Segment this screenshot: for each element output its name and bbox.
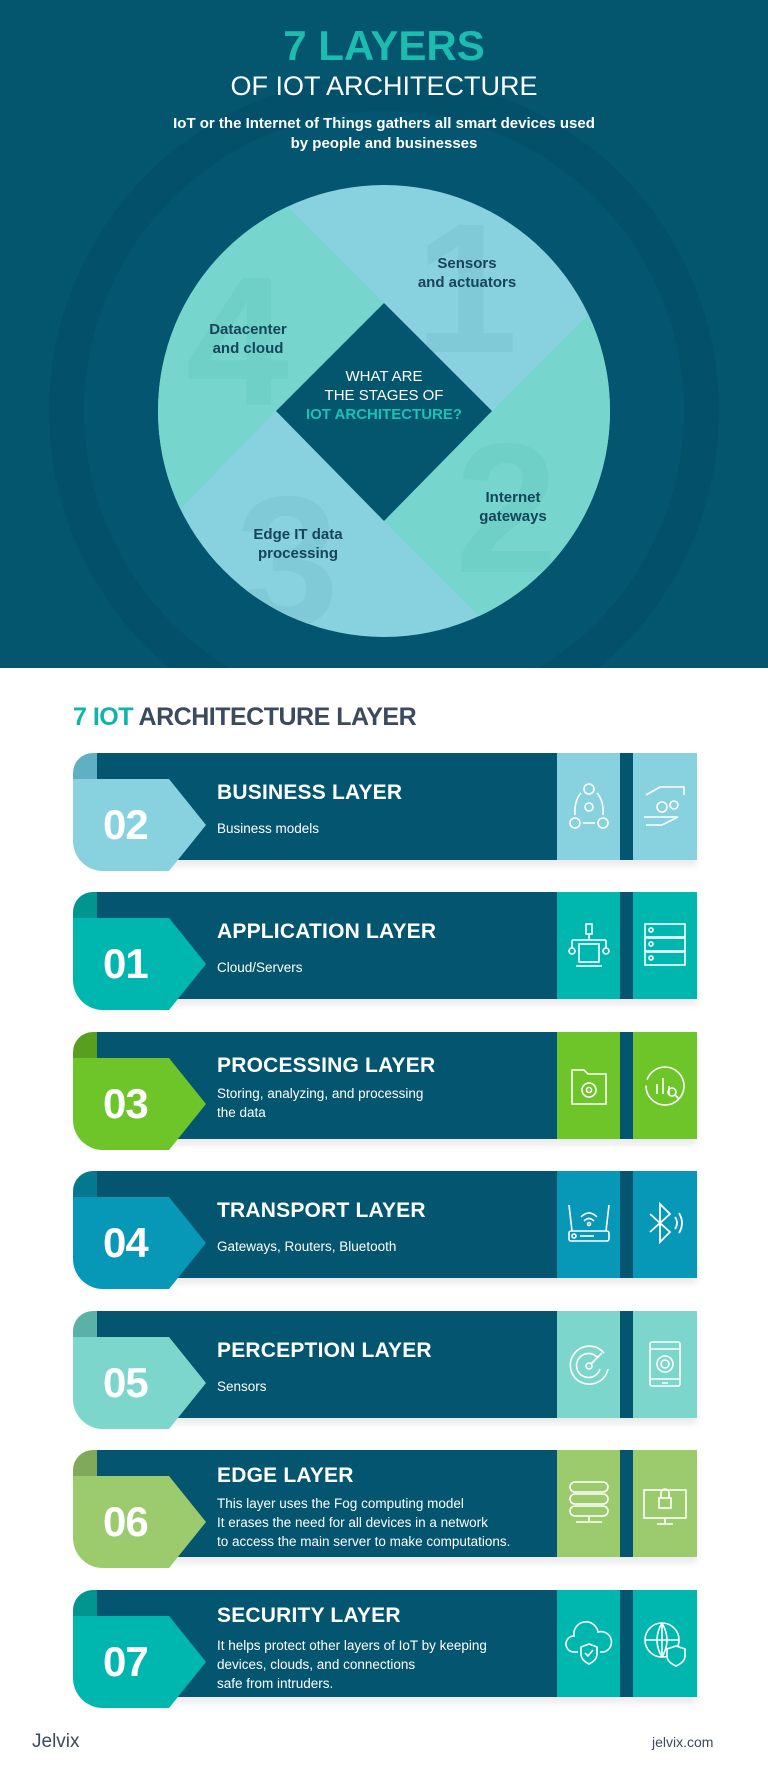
icon: monitor lock: [643, 1488, 687, 1525]
label: edge: processing: [258, 545, 338, 562]
icon: analytics: [645, 1066, 685, 1106]
subtitle: by people and businesses: [291, 135, 477, 152]
label: datacenter: [209, 321, 287, 357]
row: edge layer: [73, 1450, 698, 1568]
row: security layer: [73, 1590, 698, 1708]
row: perception layer: 05: [103, 1359, 148, 1406]
pinwheel circle diagram: 2: [455, 406, 558, 612]
label: sensors: and actuators: [418, 274, 516, 291]
icon: network node: [568, 923, 610, 967]
row: edge layer: 06: [103, 1498, 148, 1545]
center question: WHAT ARE: [346, 368, 422, 385]
title: 7 LAYERS: [283, 22, 485, 69]
row: edge layer: to access the main server to make computations.: [217, 1534, 510, 1549]
icon: folder gear: [571, 1069, 607, 1105]
row: perception layer: [73, 1311, 698, 1429]
row: business layer: BUSINESS LAYER: [217, 781, 402, 804]
title: OF IOT ARCHITECTURE: [230, 71, 538, 101]
icon: bluetooth: [650, 1202, 683, 1244]
label: gateways: gateways: [479, 508, 547, 525]
row: security layer: safe from intruders.: [217, 1676, 333, 1691]
subtitle: [173, 115, 595, 152]
row: processing layer: 03: [103, 1080, 148, 1127]
icon: servers: [644, 923, 686, 966]
icon: radar: [570, 1345, 609, 1385]
icon: phone fingerprint: [649, 1341, 681, 1387]
section heading: 7 IOT ARCHITECTURE LAYER: [73, 703, 416, 731]
row: security layer: devices, clouds, and connections: [217, 1657, 415, 1672]
label: edge: Edge IT data: [253, 526, 343, 543]
row: business layer: 02: [103, 801, 148, 848]
icon: cloud shield: [565, 1621, 612, 1665]
row: perception layer: PERCEPTION LAYER: [217, 1339, 432, 1362]
row: edge layer: This layer uses the Fog computing model: [217, 1496, 464, 1511]
label: datacenter: and cloud: [213, 340, 283, 357]
row: transport layer: [73, 1171, 698, 1289]
icon: hands gears: [644, 786, 685, 826]
top panel background: [0, 0, 768, 668]
row: transport layer: 04: [103, 1219, 148, 1266]
pinwheel circle diagram: 1: [415, 186, 518, 392]
row: application layer: 01: [103, 940, 148, 987]
subtitle: IoT or the Internet of Things gathers all smart devices used: [173, 115, 595, 132]
row: application layer: [73, 892, 698, 1010]
icon: router: [568, 1204, 610, 1242]
footer logo: Jelvix: [32, 1731, 80, 1752]
row: application layer: APPLICATION LAYER: [217, 920, 436, 943]
row: security layer: 07: [103, 1638, 148, 1685]
label: sensors: [418, 255, 516, 291]
center question: THE STAGES OF: [325, 387, 443, 404]
row: application layer: Cloud/Servers: [217, 960, 303, 975]
label: edge: [253, 526, 343, 562]
row: security layer: It helps protect other layers of IoT by keeping: [217, 1638, 487, 1653]
pinwheel circle diagram: [158, 185, 610, 637]
pinwheel circle diagram: 4: [186, 239, 289, 445]
row: edge layer: It erases the need for all devices in a network: [217, 1515, 488, 1530]
row: processing layer: the data: [217, 1105, 266, 1120]
label: gateways: Internet: [485, 489, 540, 506]
row: processing layer: Storing, analyzing, and processing: [217, 1086, 423, 1101]
label: gateways: [479, 489, 547, 525]
icon: server stack: [569, 1481, 609, 1523]
pinwheel circle diagram: 3: [236, 459, 339, 665]
row: security layer: SECURITY LAYER: [217, 1604, 401, 1627]
row: edge layer: EDGE LAYER: [217, 1464, 354, 1487]
icon: business cycle: [569, 783, 609, 829]
row: business layer: Business models: [217, 821, 319, 836]
icon: globe shield: [644, 1622, 686, 1667]
row: processing layer: [73, 1032, 698, 1150]
row: perception layer: Sensors: [217, 1379, 267, 1394]
row: processing layer: PROCESSING LAYER: [217, 1054, 435, 1077]
row: business layer: [73, 753, 698, 871]
row: transport layer: TRANSPORT LAYER: [217, 1199, 426, 1222]
title: [230, 22, 538, 101]
center question: IOT ARCHITECTURE?: [306, 406, 462, 423]
label: sensors: Sensors: [437, 255, 497, 272]
row: transport layer: Gateways, Routers, Bluetooth: [217, 1239, 396, 1254]
center question: [306, 368, 462, 423]
footer url: jelvix.com: [652, 1734, 713, 1750]
label: datacenter: Datacenter: [209, 321, 287, 338]
